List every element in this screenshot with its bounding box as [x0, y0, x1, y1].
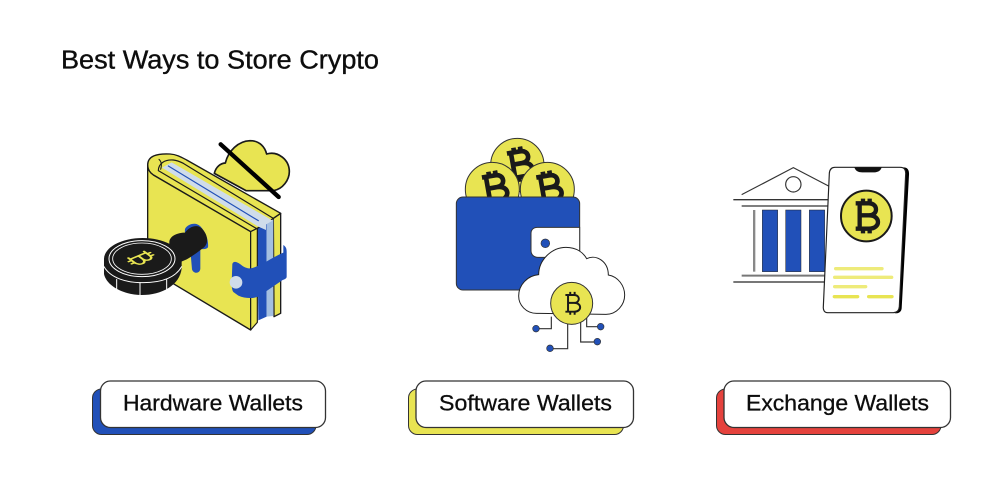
coins [465, 138, 574, 216]
title: Best Ways to Store Crypto [61, 46, 379, 74]
wallet right edge [251, 228, 257, 330]
wallet body [456, 197, 580, 290]
wallet back cover [273, 213, 281, 317]
bank [733, 168, 832, 282]
label: hardware wallets: Hardware Wallets [123, 390, 303, 416]
icon: crossed-out cloud [214, 141, 289, 197]
cloud [519, 247, 625, 314]
wallet pages [257, 223, 267, 320]
icon: hardware wallet illustration [104, 141, 289, 330]
label: software wallets [408, 381, 634, 434]
key shaft [169, 226, 207, 263]
wallet top surface [148, 154, 281, 232]
phone text lines [834, 269, 892, 297]
label: hardware wallets [92, 381, 326, 434]
label: software wallets: Software Wallets [439, 390, 612, 416]
wallet front face [148, 165, 251, 330]
phone [823, 167, 909, 313]
phone coin [841, 191, 892, 241]
coin [104, 238, 182, 295]
wallet clasp [531, 227, 580, 257]
label: exchange wallets [716, 381, 950, 434]
circuit lines [536, 317, 601, 349]
wallet top opening [158, 160, 273, 229]
circuit nodes [533, 323, 604, 352]
icon: skewed bitcoin mark on coin [125, 250, 157, 267]
label: exchange wallets: Exchange Wallets [746, 390, 929, 416]
center coin [551, 282, 593, 324]
icon: exchange wallet illustration [733, 167, 909, 313]
keyhole [185, 224, 208, 273]
strap [232, 245, 287, 298]
icon: software wallet illustration [456, 138, 625, 352]
